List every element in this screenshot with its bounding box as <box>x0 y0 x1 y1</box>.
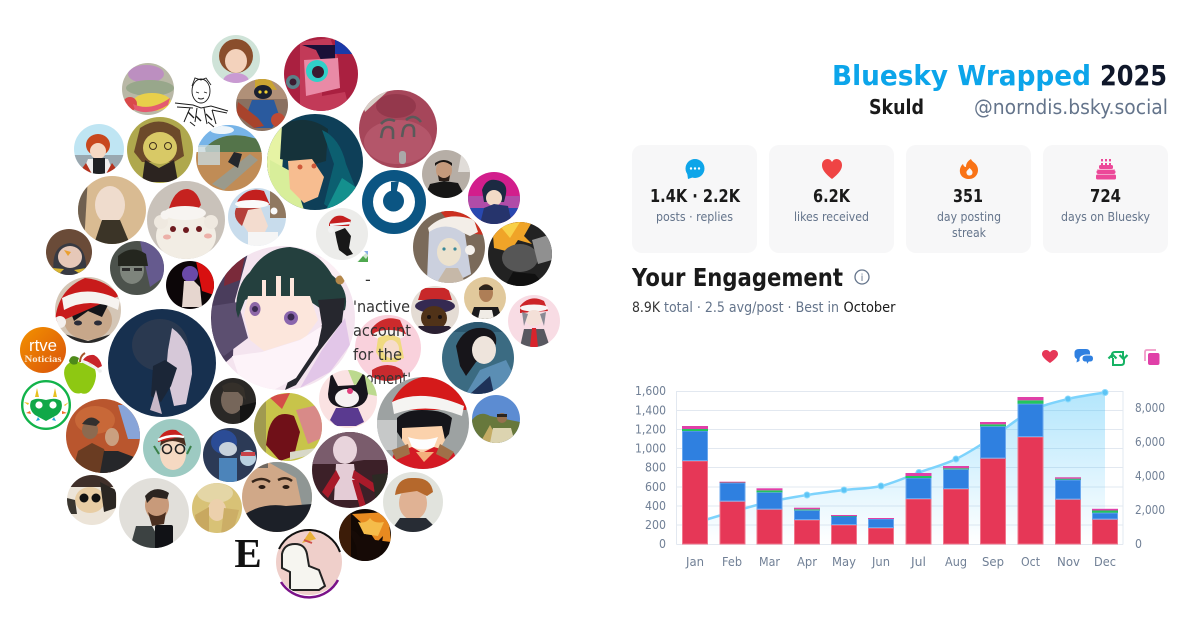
chart: cumulative area <box>695 392 1105 544</box>
avatar: grey sketch with purple <box>110 241 164 295</box>
avatar: bear with santa hat <box>147 181 225 260</box>
chart: left axis labels: 200 <box>645 518 666 532</box>
chart: left axis labels: 1,400 <box>635 404 666 418</box>
avatar cluster <box>20 35 560 597</box>
avatar: white circle with letter E: E <box>234 530 262 576</box>
avatar: rtve Noticias logo <box>20 327 66 373</box>
avatar: furry hat character <box>411 286 459 334</box>
avatar: penguin character <box>46 229 92 275</box>
avatar: dark-haired boy with santa hat <box>54 277 121 343</box>
avatar: man in leather jacket <box>422 150 470 198</box>
avatar: red knitted blob <box>359 90 437 168</box>
icon: flame <box>960 159 978 179</box>
avatar: white circle with letter E <box>223 527 273 577</box>
chart: right axis labels <box>1135 401 1165 551</box>
broken image placeholder and alt text: account <box>353 321 411 340</box>
avatar: green apple with santa hat <box>64 353 102 394</box>
icon: quotes legend <box>1145 350 1160 365</box>
chart: stacked monthly bars <box>682 397 1118 544</box>
avatar: man taking a mirror selfie <box>119 478 189 549</box>
icon: replies legend <box>1074 349 1094 365</box>
title: 2025 <box>1100 59 1167 92</box>
broken image placeholder and alt text: - <box>365 270 371 289</box>
avatar: red figure on yellow background <box>254 393 322 461</box>
chart: cumulative points <box>804 390 1108 498</box>
chart: month labels: Oct <box>1021 555 1040 569</box>
avatar: man in the countryside <box>472 395 520 444</box>
avatar: pen sketch of a man <box>175 78 228 127</box>
avatar: bearded man with beanie <box>242 462 312 532</box>
broken image placeholder and alt text: moment' <box>353 369 411 388</box>
avatar: blue ring logo <box>362 170 426 234</box>
chart: left axis labels: 600 <box>645 480 666 494</box>
icon: chat bubble <box>686 159 704 179</box>
chart: month labels: Jun <box>871 555 890 569</box>
chart: right axis labels: 4,000 <box>1135 469 1165 483</box>
avatar: green mask logo <box>22 381 70 429</box>
avatar: anime character in santa hat and red tie <box>508 295 560 347</box>
chart gridlines <box>676 391 1123 544</box>
panel: likes received <box>769 145 894 253</box>
avatar: dark navy portrait with pale hair <box>108 309 216 417</box>
avatar: dark-haired boy on magenta <box>468 172 520 224</box>
engagement summary: 8.9K <box>632 300 661 316</box>
panel: day posting streak: day posting <box>937 209 1001 224</box>
avatar: silhouette before a fire <box>339 509 391 566</box>
icon: info: i <box>861 273 863 284</box>
avatar: black silhouette with santa hat <box>316 208 368 260</box>
engagement summary: total · 2.5 avg/post · Best in <box>664 300 839 316</box>
avatar: cat with sunglasses <box>67 475 117 525</box>
chart: left axis labels: 800 <box>645 460 666 474</box>
engagement summary: October <box>844 300 896 316</box>
chart: month labels: Apr <box>797 555 817 569</box>
avatar: man in t-shirt <box>464 277 506 319</box>
icon: heart <box>822 159 842 179</box>
avatar: colourful illustration <box>122 63 174 115</box>
panel: posts and replies: 1.4K · 2.2K <box>650 186 741 207</box>
panel: day posting streak: streak <box>952 225 987 240</box>
title: Bluesky Wrapped <box>832 59 1091 92</box>
avatar: teal-haired anime girl <box>267 114 363 210</box>
avatar: couple under autumn tree <box>66 399 140 473</box>
chart: left axis labels: 1,000 <box>635 442 666 456</box>
profile name and handle: Skuld <box>869 95 924 119</box>
panel: likes received: 6.2K <box>813 186 851 207</box>
chart: month labels: Sep <box>982 555 1004 569</box>
chart: month labels: Feb <box>722 555 742 569</box>
avatar: man on a bench by the coast <box>196 125 262 192</box>
chart: cumulative line <box>695 392 1105 523</box>
profile name and handle: @norndis.bsky.social <box>974 95 1168 119</box>
broken image placeholder and alt text: for the <box>353 345 402 364</box>
icon: likes legend <box>1042 350 1058 363</box>
chart: right axis labels: 8,000 <box>1135 401 1165 415</box>
avatar: orange-haired anime boy <box>74 124 124 175</box>
chart: month labels: Dec <box>1094 555 1116 569</box>
avatar: rtve Noticias logo: Noticias <box>24 355 62 365</box>
heading: Your Engagement: Your Engagement <box>631 263 843 292</box>
avatar: cartoon man with glasses and santa hat <box>143 419 201 477</box>
avatar: grey character with orange flames <box>488 222 552 286</box>
chart: right axis labels: 2,000 <box>1135 503 1165 517</box>
avatar: olive portrait <box>127 117 193 183</box>
broken image placeholder and alt text: 'nactive <box>353 297 410 316</box>
panel: day posting streak: 351 <box>953 186 983 207</box>
avatar: anime eye in red frame <box>284 37 359 112</box>
avatar: Jack Skellington santa <box>312 432 388 508</box>
profile name and handle <box>869 95 1168 119</box>
avatar: dark-haired game character <box>210 378 256 424</box>
chart legend icons <box>1042 349 1160 365</box>
avatar: blue-haired cartoon girl <box>203 428 257 482</box>
chart: month labels: Aug <box>945 555 967 569</box>
panel: days on Bluesky: days on Bluesky <box>1061 209 1151 224</box>
chart: right axis labels: 0 <box>1135 537 1142 551</box>
icon: birthday cake <box>1096 159 1116 180</box>
avatar: elephant with party hat <box>276 529 342 597</box>
chart: month labels: Nov <box>1057 555 1080 569</box>
panel: days on Bluesky <box>1043 145 1168 253</box>
avatar: black-haired girl in bed <box>442 322 514 394</box>
panel: days on Bluesky: 724 <box>1090 186 1121 207</box>
avatar: blue mage <box>236 74 288 131</box>
chart: left axis labels: 1,200 <box>635 422 666 436</box>
chart: month labels: May <box>832 555 856 569</box>
chart: month labels: Jan <box>685 555 704 569</box>
chart: month labels: Mar <box>759 555 780 569</box>
chart: month labels <box>685 555 1116 569</box>
avatar: main anime girl with dark green hair <box>211 246 355 392</box>
avatar: ginger man <box>383 472 443 532</box>
avatar: red-haired boy with santa hat <box>228 188 286 246</box>
chart: left axis labels <box>635 384 666 551</box>
avatar: Luffy with santa hat <box>377 376 469 469</box>
panel: posts and replies <box>632 145 757 253</box>
avatar: cartoon woman with brown hair <box>212 35 260 83</box>
avatar: Frieren with santa hat <box>413 211 485 284</box>
avatar: figure on red and black <box>166 261 214 309</box>
chart: month labels: Jul <box>910 555 926 569</box>
broken image placeholder and alt text <box>353 251 411 388</box>
avatar: rtve Noticias logo: rtve <box>29 336 57 355</box>
icon: reposts legend <box>1108 352 1128 365</box>
chart: left axis labels: 1,600 <box>635 384 666 398</box>
panel: posts and replies: posts · replies <box>656 209 733 224</box>
avatar: golden-haired statue <box>192 483 242 534</box>
chart: left axis labels: 0 <box>659 537 666 551</box>
avatar: Kuromi character <box>319 370 377 428</box>
chart: engagement bars and cumulative line <box>635 384 1165 569</box>
avatar: blonde anime girl <box>78 176 146 244</box>
chart: right axis labels: 6,000 <box>1135 435 1165 449</box>
chart: left axis labels: 400 <box>645 499 666 513</box>
icon: info <box>855 270 869 284</box>
panel: day posting streak <box>906 145 1031 253</box>
avatar: pink background blonde girl <box>355 315 421 382</box>
panel: likes received: likes received <box>794 209 869 224</box>
